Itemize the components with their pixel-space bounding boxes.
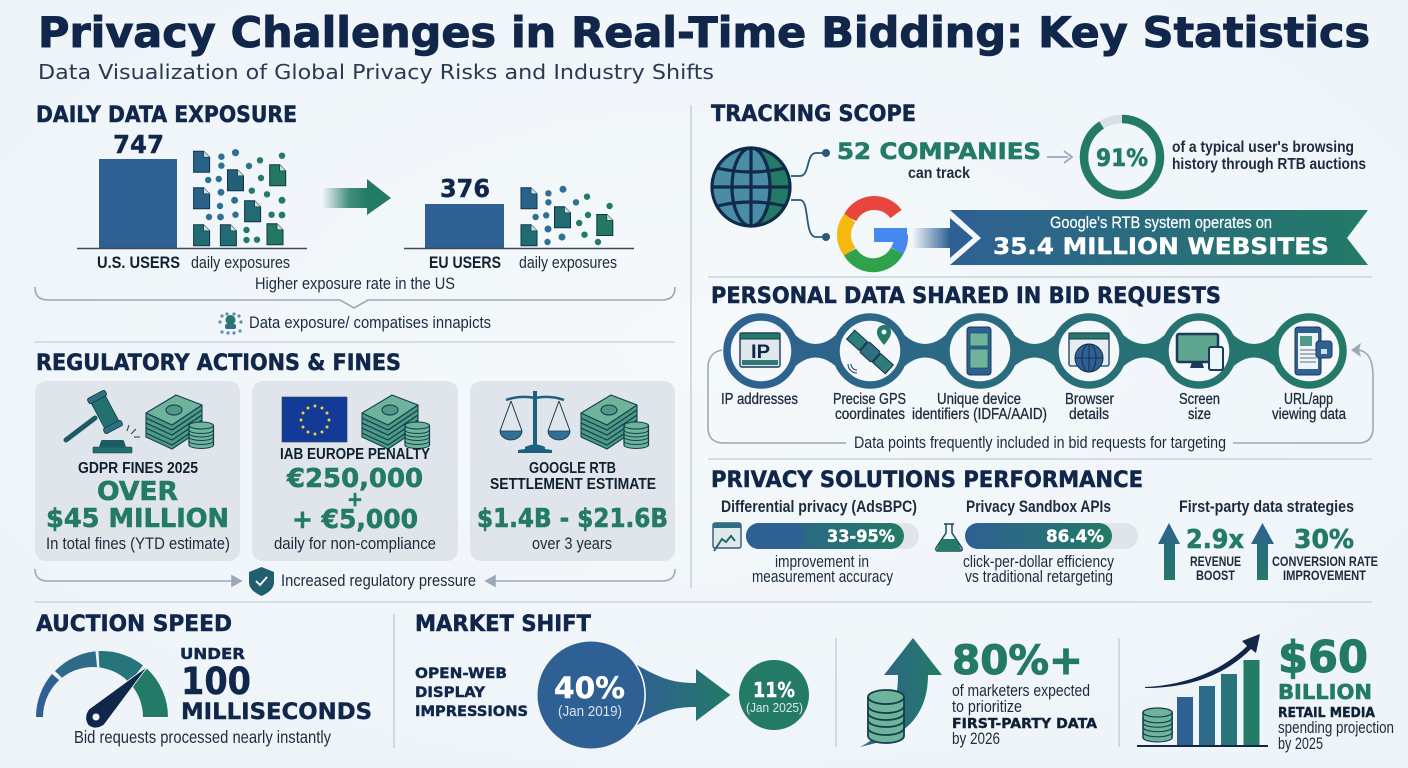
card: GDPR fines [35,381,240,561]
arrow: conversion [1251,523,1274,580]
banner: 35.4 million websites: Google's RTB system operates on [1050,214,1272,232]
panel: regulatory actions and fines [35,351,675,596]
heading: auction speed: AUCTION SPEED [36,612,232,637]
panel: personal data shared [708,284,1373,452]
arrow: growth [1145,634,1260,688]
label: differential privacy: Differential privacy (AdsBPC) [721,497,917,516]
label: boost: BOOST [1196,567,1235,583]
label: US users: U.S. USERS [97,253,180,272]
label: open-web: OPEN-WEB [415,666,507,682]
label: screen 2: size [1188,406,1211,423]
label: browser 2: details [1069,406,1109,423]
circle: 11%: (Jan 2025) [746,700,803,715]
card: IAB Europe penalty [252,381,458,561]
note: improvement in [775,552,869,571]
bar: EU users [425,204,504,248]
chart: 91% ring [1084,119,1160,195]
arrow head loop [1351,343,1361,357]
plus: + [347,487,363,511]
caption: data exposure: Data exposure/ compatises innapicts [249,313,491,332]
panel: privacy solutions performance [711,468,1378,586]
title: Privacy Challenges in Real-Time Bidding: Key Statistics [38,8,1370,57]
arrow: to ring [1047,151,1072,163]
value: 100: 100 [181,660,251,703]
note: daily for non-compliance [274,534,436,553]
banner: 35.4 million websites: 35.4 MILLION WEBSITES [993,235,1329,260]
arrow: revenue [1158,523,1180,580]
circle: 40%: (Jan 2019) [558,703,622,720]
label: browser: Browser [1065,391,1114,408]
icon: globe [712,148,790,226]
label: revenue: REVENUE [1190,553,1241,569]
value: $1.4B - $21.6B [477,504,668,534]
label: url: URL/app [1284,391,1333,408]
panel: daily data exposure [35,103,675,335]
label: daily exposures EU: daily exposures [519,253,617,272]
circle: 11%: 11% [753,678,795,702]
subtitle: Data Visualization of Global Privacy Risks and Industry Shifts [38,60,714,84]
label: privacy sandbox: Privacy Sandbox APIs [966,497,1111,516]
bracket [35,287,675,308]
panel: retail media [1137,632,1394,753]
value: 5000: + €5,000 [292,505,418,535]
label: first-party: First-party data strategies [1179,497,1354,516]
icon: browser chart [713,523,741,551]
icon: money stack [146,395,213,449]
stat: 52 companies: 52 COMPANIES [837,140,1041,165]
card: Google RTB settlement [470,381,675,561]
icon: US data documents [194,149,286,246]
heading: daily data exposure: DAILY DATA EXPOSURE [36,103,297,128]
icon: database stack [868,690,904,743]
arrow: funnel [637,665,730,725]
label: GPS 2: coordinates [835,406,905,423]
value: 376: 376 [440,174,490,203]
text: by 2026 [952,729,1000,748]
panel: 80% marketers [860,638,1098,748]
text bold: FIRST-PARTY DATA [952,716,1098,732]
connector dots [822,149,830,241]
note 2: vs traditional retargeting [965,567,1113,586]
banner: 35.4 million websites [950,210,1368,265]
text: browsing history: of a typical user's browsing [1172,139,1354,156]
icon: money stack [581,395,648,449]
label: url 2: viewing data [1272,406,1346,423]
chart: growth bars [1137,660,1268,746]
icon: shield [249,567,274,596]
icon: EU data documents [521,186,613,246]
value: under: UNDER [180,645,245,663]
text bold: RETAIL MEDIA [1278,705,1375,721]
label: device 2: identifiers (IDFA/AAID) [912,406,1047,423]
icon: gavel [66,390,140,453]
icon: IP window [740,333,780,367]
icon: money stack [362,395,429,449]
label: GDPR FINES 2025 [78,460,198,477]
heading: market shift: MARKET SHIFT [415,612,591,637]
note 2: measurement accuracy [752,567,893,586]
progress bar: 86.4%: 86.4% [1046,527,1104,547]
caption: higher exposure rate: Higher exposure rate in the US [255,274,455,293]
circle: 40%: 40% [554,671,625,705]
needle [86,666,148,728]
text: by 2025 [1278,734,1323,753]
text: of marketers expected [952,681,1090,700]
value: 250000: €250,000 [286,464,423,494]
icon: browser with globe [1069,333,1109,372]
label: EU users: EU USERS [429,253,501,272]
note: Bid requests processed nearly instantly [74,727,331,747]
bracket arrows [35,569,675,586]
note: click-per-dollar efficiency [963,552,1114,571]
value: 747: 747 [113,130,164,159]
icon: IP window: IP [751,342,770,363]
stat: 2.9x: 2.9x [1186,525,1244,555]
stat: 30%: 30% [1294,525,1354,555]
value: milliseconds: MILLISECONDS [181,700,372,725]
icon: rising arrow [860,638,942,747]
text: browsing history 2: history through RTB auctions [1172,156,1366,173]
label line 2: SETTLEMENT ESTIMATE [490,476,656,493]
bar: US users [99,159,177,248]
label: conversion rate: CONVERSION RATE [1272,553,1378,569]
loop outline [708,350,1373,443]
icon: google G [844,203,907,265]
value: 45 million: $45 MILLION [46,504,229,534]
heading: regulatory actions: REGULATORY ACTIONS & FINES [36,351,401,376]
label: display: DISPLAY [415,685,486,701]
text: to prioritize [952,697,1022,716]
icon: user with data dots [218,312,243,335]
icon: phone with lock [1295,327,1332,375]
progress bar: 33-95% [746,523,919,549]
heading: tracking scope: TRACKING SCOPE [711,102,916,127]
label: impressions: IMPRESSIONS [415,704,528,720]
connectors [791,153,825,237]
arrow: google to banner [912,218,973,258]
label: improvement: IMPROVEMENT [1283,567,1366,583]
label: GOOGLE RTB [529,460,616,477]
chain of circles [727,317,1343,385]
icon: monitor and phone [1177,334,1223,370]
caption: increased regulatory pressure: Increased regulatory pressure [281,571,476,590]
chart: 91% ring: 91% [1096,144,1148,172]
label: screen: Screen [1179,391,1220,408]
icon: database stack [1143,708,1172,742]
label: can track: can track [908,165,970,182]
label: device: Unique device [937,391,1021,408]
value: over: OVER [97,477,178,507]
caption: data points: Data points frequently included in bid requests for targeting [854,433,1226,452]
stat: billion: BILLION [1278,680,1372,704]
arrow: US to EU [322,179,391,215]
heading: personal data: PERSONAL DATA SHARED IN BID REQUESTS [711,284,1221,309]
circle: 40% [537,641,645,749]
note: In total fines (YTD estimate) [46,534,230,553]
circle: 11% [739,660,809,730]
icon: phone [967,327,991,375]
stat: 80%+: 80%+ [952,638,1083,684]
icon: satellite and pin [846,325,894,375]
label: daily exposures US: daily exposures [191,253,290,272]
gauge [36,651,168,728]
icon: scales [500,391,570,453]
heading: privacy solutions: PRIVACY SOLUTIONS PERFORMANCE [711,468,1143,493]
panel: auction speed [36,612,372,747]
panel: market shift [415,612,809,749]
stat: $60: $60 [1278,632,1368,683]
icon: flask [936,524,962,551]
label: IP addresses: IP addresses [721,391,798,408]
progress bar: 86.4% [965,523,1138,549]
label: IAB EUROPE PENALTY [280,446,430,463]
panel: tracking scope [711,102,1368,265]
icon: EU flag [282,397,347,442]
label: GPS: Precise GPS [833,391,906,408]
progress bar: 33-95%: 33-95% [827,527,895,547]
note: over 3 years [532,534,612,553]
